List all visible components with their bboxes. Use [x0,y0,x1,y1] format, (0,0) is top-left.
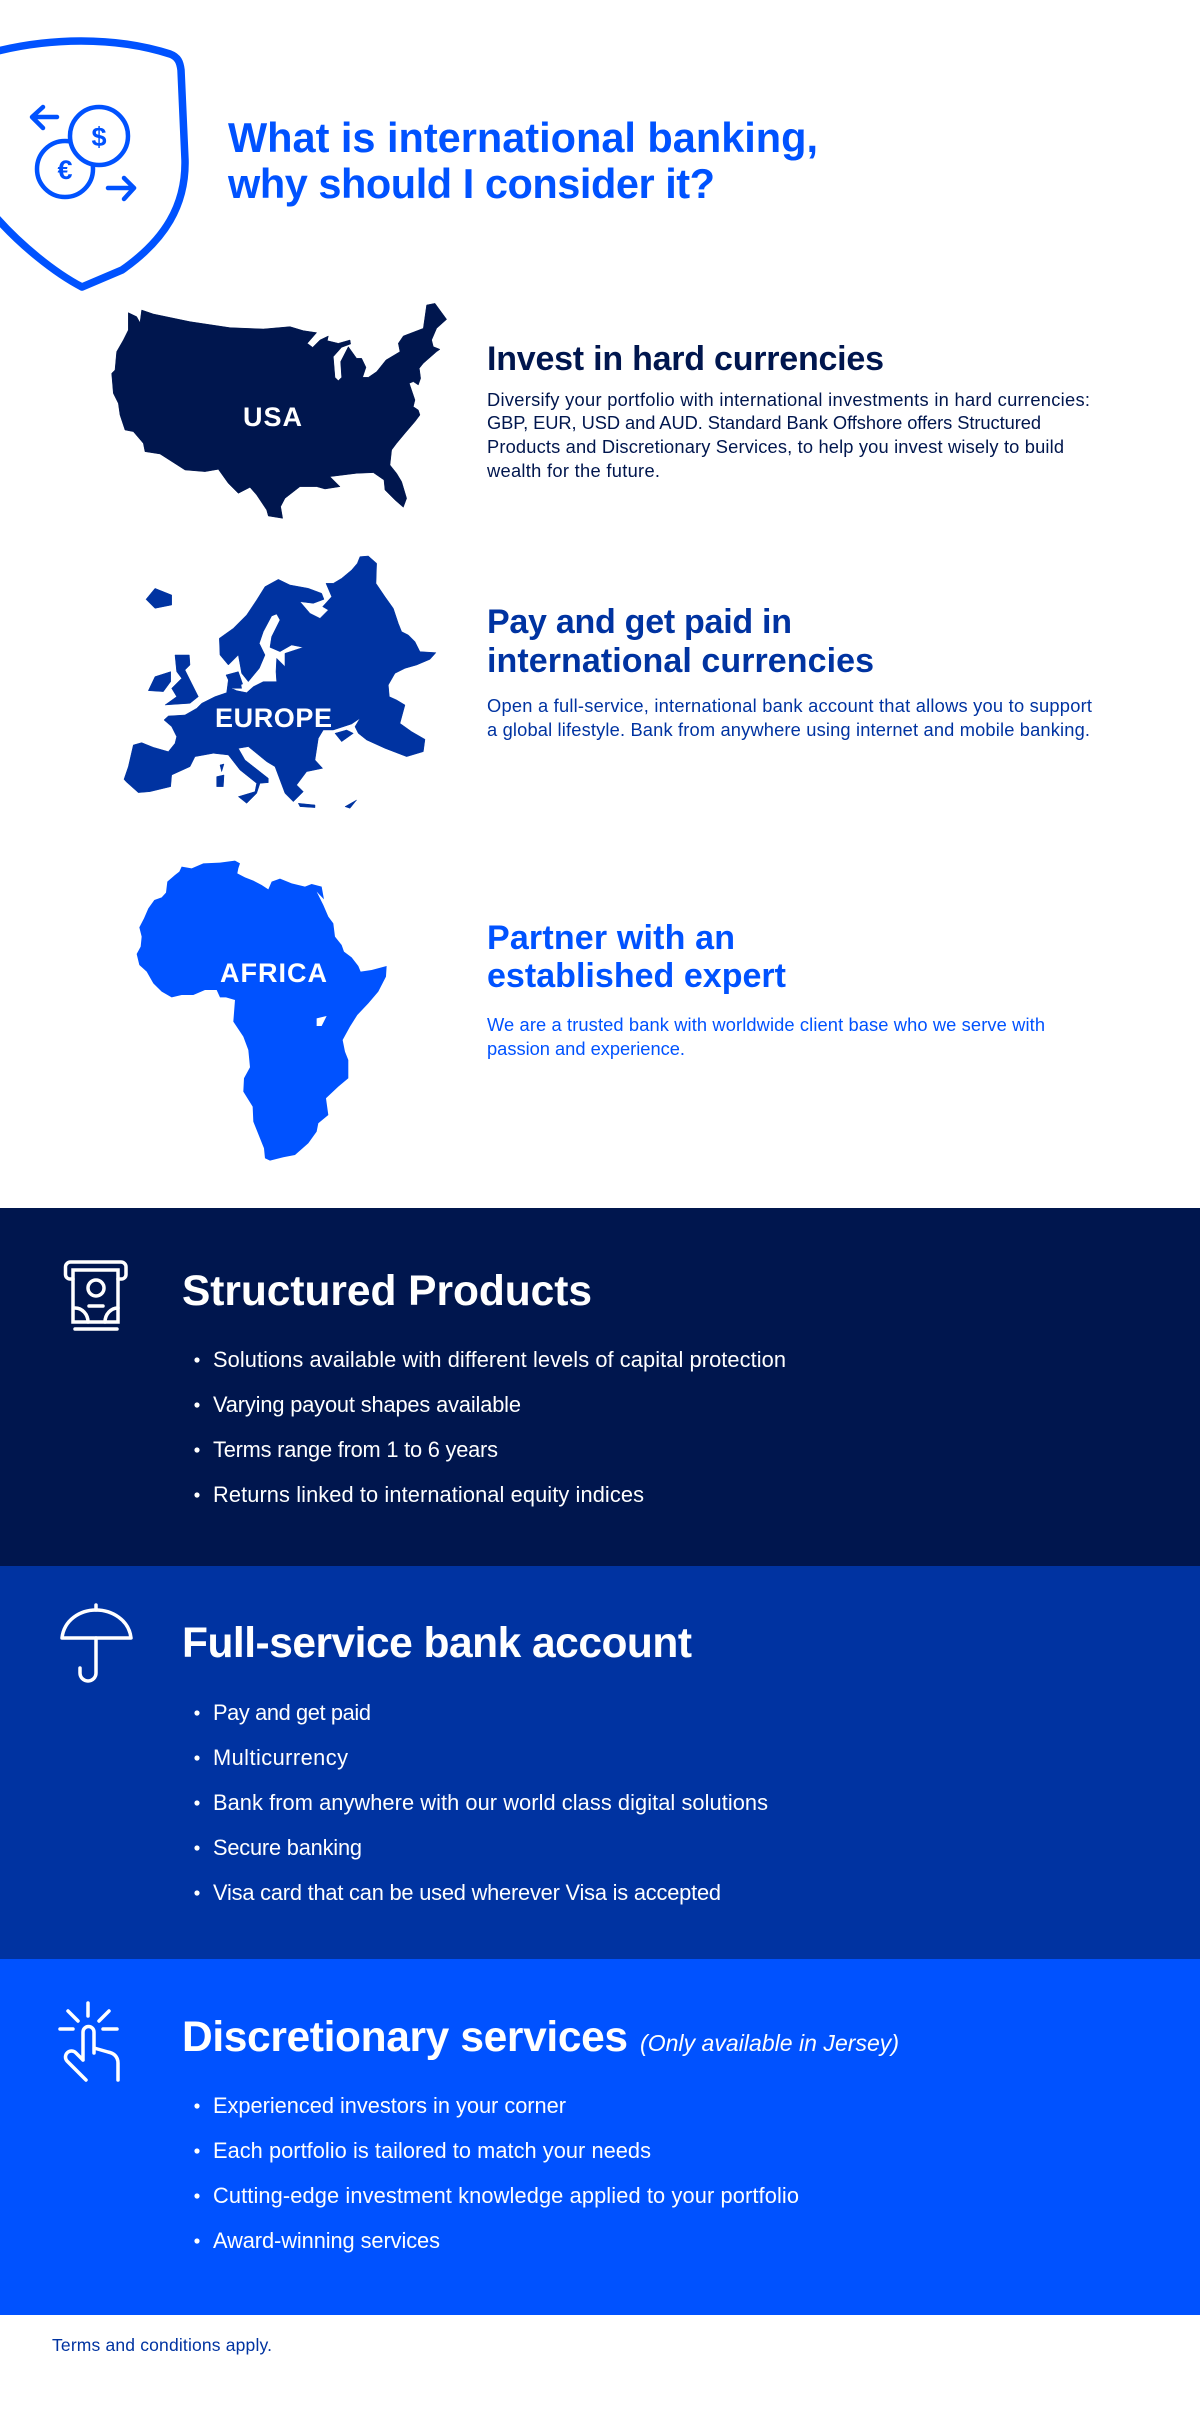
map: Europe [124,556,436,808]
icon: shield with currency coins: € [57,155,73,185]
icon: shield with currency coins [0,41,185,287]
list: structured products features: Terms range from 1 to 6 years [213,1437,498,1462]
list: structured products features: Returns linked to international equity indices [213,1482,644,1507]
list: structured products features [194,1347,786,1507]
list: bank account features [194,1700,768,1905]
heading and text: partner with an established expert: We are a trusted bank with worldwide client base who we serve with [487,1014,1045,1035]
heading and text: invest in hard currencies: Invest in hard currencies [487,340,884,378]
heading: full-service bank account: Full-service bank account [182,1620,692,1667]
heading and text: invest in hard currencies [486,340,1090,481]
list: structured products features: Varying payout shapes available [213,1392,521,1417]
footer note: Terms and conditions apply. [52,2335,272,2355]
list: discretionary services features: Cutting-edge investment knowledge applied to your portfolio [213,2183,799,2208]
map: Africa [137,861,387,1161]
panel: structured products [0,1208,1200,1566]
icon: shield with currency coins: $ [91,122,107,152]
list: structured products features: Solutions available with different levels of capital protection [213,1347,786,1372]
list: discretionary services features: Award-winning services [213,2228,440,2253]
list: bank account features: Multicurrency [213,1745,348,1770]
heading and text: partner with an established expert: passion and experience. [487,1038,685,1059]
icon: tapping hand [60,2003,118,2080]
map: Africa: AFRICA [220,958,327,988]
panel: full-service bank account [0,1566,1200,1959]
list: bank account features: Pay and get paid [213,1700,371,1725]
heading and text: invest in hard currencies: Products and Discretionary Services, to help you invest wisely to build [487,436,1064,457]
heading and text: partner with an established expert [487,919,1045,1059]
map: USA [112,303,447,518]
note: only available in Jersey: (Only available in Jersey) [640,2030,899,2056]
list: bank account features: Secure banking [213,1835,362,1860]
heading and text: partner with an established expert: established expert [487,957,786,995]
list: discretionary services features: Each portfolio is tailored to match your needs [213,2138,651,2163]
title [227,114,818,207]
map: USA: USA [243,402,302,432]
heading and text: pay and get paid: international currencies [487,642,874,680]
heading and text: pay and get paid: a global lifestyle. Bank from anywhere using internet and mobile banking. [487,719,1090,740]
heading and text: pay and get paid: Open a full-service, international bank account that allows you to support [487,695,1092,716]
list: bank account features: Visa card that can be used wherever Visa is accepted [213,1880,721,1905]
icon: umbrella [62,1605,131,1681]
panel: discretionary services [0,1959,1200,2315]
heading: discretionary services: Discretionary services [182,2014,628,2061]
heading and text: invest in hard currencies: Diversify your portfolio with international investments in hard currencies: [487,389,1090,410]
title: What is international banking, [228,114,818,161]
list: discretionary services features [194,2093,799,2253]
heading and text: partner with an established expert: Partner with an [487,919,735,957]
list: bank account features: Bank from anywhere with our world class digital solutions [213,1790,768,1815]
heading and text: pay and get paid: Pay and get paid in [487,603,792,641]
heading and text: invest in hard currencies: wealth for the future. [486,460,660,481]
icon: cash machine [66,1262,126,1329]
heading and text: pay and get paid [487,603,1092,740]
list: discretionary services features: Experienced investors in your corner [213,2093,566,2118]
title: why should I consider it? [227,160,715,207]
map: Europe: EUROPE [215,703,332,733]
heading: structured products: Structured Products [182,1268,592,1315]
heading and text: invest in hard currencies: GBP, EUR, USD and AUD. Standard Bank Offshore offers Structured [487,412,1041,433]
